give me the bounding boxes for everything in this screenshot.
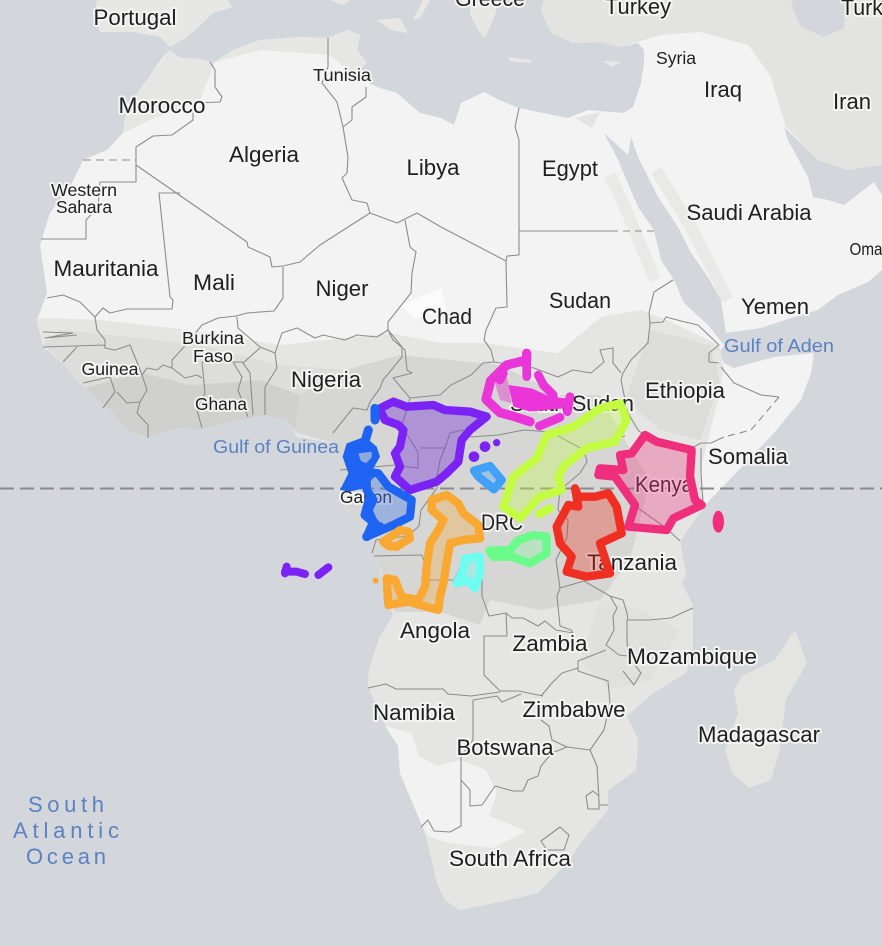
labels: Southern Africa: Botswana [456, 735, 554, 760]
outline: Austria (green) [489, 535, 547, 563]
outline: United Kingdom (blue) [340, 408, 412, 537]
outline: Netherlands (light blue) [474, 466, 502, 489]
labels: Southern Africa: Madagascar [698, 722, 820, 747]
labels: North and West Africa: Guinea [82, 359, 139, 379]
labels: North and West Africa: Morocco [118, 93, 206, 118]
labels: North and West Africa [51, 65, 611, 414]
labels: Central and East Africa: Ethiopia [645, 378, 726, 403]
overlaid outlines traced at 3x, group one [285, 353, 570, 610]
shading: Red Sea coastal hills [610, 170, 728, 300]
labels: Europe and Middle East: Yemen [741, 294, 809, 319]
labels: Southern Africa: Zimbabwe [522, 697, 626, 722]
outline: Spain (purple) [285, 402, 500, 575]
labels: North and West Africa: Tunisia [313, 65, 371, 85]
labels: Europe and Middle East: Portugal [94, 5, 176, 30]
labels: Southern Africa: Mozambique [627, 644, 757, 669]
shading: Ethiopian highlands [625, 330, 720, 440]
labels: Southern Africa: South Africa [449, 846, 572, 871]
shading: Turkey and Iran highlands [541, 0, 882, 170]
labels: North and West Africa: Nigeria [291, 367, 362, 392]
water: Caspian Sea [791, 0, 846, 37]
shading: Chad desert highlight [400, 288, 446, 318]
shading: East Africa mountains [580, 600, 680, 690]
labels: Central and East Africa: Tanzania [587, 550, 678, 575]
labels: Central and East Africa: Gabon [340, 487, 392, 507]
labels: North and West Africa: Mali [193, 270, 235, 295]
outline: Italy (orange) [373, 495, 480, 610]
labels: North and West Africa: Libya [406, 155, 460, 180]
shading: West Africa forest [85, 372, 300, 438]
outline: Greece (cyan) [457, 557, 480, 588]
labels: Southern Africa: Angola [400, 618, 471, 643]
water: Persian Gulf [784, 127, 882, 205]
label: South Atlantic Ocean: Atlantic [13, 818, 119, 843]
labels: Central and East Africa: South Sudan [510, 391, 634, 416]
labels: North and West Africa: Chad [422, 304, 472, 329]
labels: Europe and Middle East: Saudi Arabia [686, 200, 812, 225]
label: South Atlantic Ocean: Ocean [26, 844, 106, 869]
shading: Sahel and sub-Saharan vegetation band [37, 310, 724, 910]
equator dashed line [0, 488, 882, 490]
labels: North and West Africa: Niger [316, 276, 368, 301]
labels: North and West Africa: Ghana [195, 394, 247, 414]
labels: North and West Africa: Faso [193, 346, 233, 366]
labels: Southern Africa [373, 618, 820, 871]
labels: North and West Africa: Western [51, 180, 117, 200]
labels: Europe and Middle East: Iran [833, 89, 871, 114]
outline: Germany (red) [557, 488, 622, 577]
country borders [41, 38, 779, 850]
labels: Central and East Africa: Somalia [708, 444, 789, 469]
shading: West Africa mid band [43, 330, 345, 395]
outline: scattered magenta shape [486, 353, 570, 426]
outline: France (pink) [598, 435, 724, 533]
labels: North and West Africa: Sahara [56, 197, 112, 217]
overlaid outlines traced at 3x, group two [503, 403, 724, 577]
labels: North and West Africa: Sudan [549, 288, 611, 313]
label: South Atlantic Ocean: South [28, 792, 104, 817]
labels: Europe and Middle East: Syria [656, 48, 696, 68]
shading: central Africa forest [295, 355, 650, 625]
land: Madagascar [725, 630, 807, 788]
label: Gulf of Guinea: Gulf of Guinea [213, 437, 340, 457]
labels: Southern Africa: Namibia [373, 700, 456, 725]
shading: arid south-west Africa [385, 726, 526, 848]
shading: North African coast [123, 30, 367, 133]
label: Gulf of Aden: Gulf of Aden [724, 336, 834, 356]
shading: Nile delta [575, 112, 600, 128]
labels: North and West Africa: Algeria [229, 142, 300, 167]
labels: North and West Africa: Burkina [182, 328, 244, 348]
water labels [13, 336, 834, 869]
labels: Europe and Middle East: Iraq [704, 77, 742, 102]
labels: Central and East Africa [340, 378, 789, 575]
outline: Sweden (lime) [503, 403, 627, 518]
labels: Central and East Africa: Kenya [635, 472, 694, 497]
labels: Europe and Middle East [94, 0, 882, 319]
land: southern Europe fragments [95, 0, 621, 67]
labels: Southern Africa: Zambia [512, 631, 588, 656]
labels: North and West Africa: Egypt [542, 156, 598, 181]
labels: North and West Africa: Mauritania [54, 256, 159, 281]
labels: Central and East Africa: DRC [481, 510, 523, 535]
